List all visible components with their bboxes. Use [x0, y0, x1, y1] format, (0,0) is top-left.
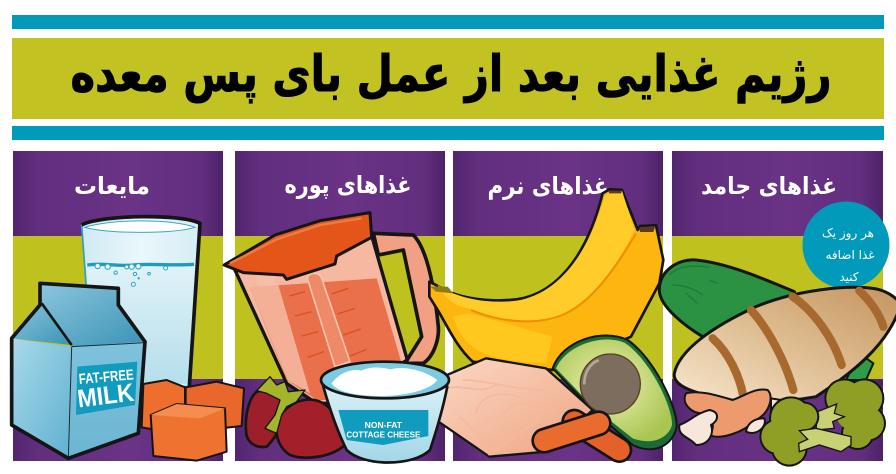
milk label: MILK: [76, 379, 136, 413]
heading: liquids: مایعات: [74, 172, 150, 200]
icon: carrots: [544, 422, 619, 450]
icon: shrimp and mushrooms: [679, 389, 781, 445]
heading: soft foods: غذاهای نرم: [488, 172, 608, 200]
bottom teal bar: [12, 126, 884, 140]
icon: bananas: [429, 189, 663, 370]
callout: add one food each day: کنید: [839, 270, 859, 284]
cheese label: [338, 410, 428, 445]
icon: cucumber: [659, 260, 873, 380]
top teal bar: [12, 15, 884, 29]
icon: gelatin cubes: [142, 380, 244, 461]
cottage cheese and soft-food layer: [431, 336, 677, 457]
icon: salmon fillet: [431, 358, 593, 457]
panel: soft foods: [453, 151, 663, 461]
icon: strawberries: [246, 377, 345, 458]
panel: liquids: [13, 151, 223, 461]
right half illustrations: banana: [429, 189, 663, 370]
panel: solid foods: [672, 151, 883, 461]
icon: broccoli: [759, 378, 886, 467]
cheese label: NON-FAT: [365, 420, 403, 430]
heading: pureed foods: غذاهای پوره: [284, 171, 412, 199]
callout: add one food each day: هر روز یک: [822, 226, 874, 241]
left half illustrations: [12, 213, 438, 461]
cheese label: COTTAGE CHEESE: [346, 429, 421, 439]
icon: blender jug: [224, 213, 438, 403]
icon: fat-free milk carton: [12, 283, 145, 458]
callout: add one food each day: [802, 202, 890, 288]
icon: glass of water: [82, 217, 200, 387]
milk label: [76, 362, 137, 415]
milk label: FAT-FREE: [78, 367, 135, 388]
icon: avocado: [553, 336, 677, 449]
icon: grilled chicken: [674, 287, 896, 401]
title banner: [12, 38, 884, 119]
panel: pureed foods: [235, 151, 445, 461]
callout: add one food each day: غذا اضافه: [825, 248, 875, 262]
heading: solid foods: غذاهای جامد: [701, 172, 837, 200]
icon: cottage cheese tub: [321, 362, 449, 462]
